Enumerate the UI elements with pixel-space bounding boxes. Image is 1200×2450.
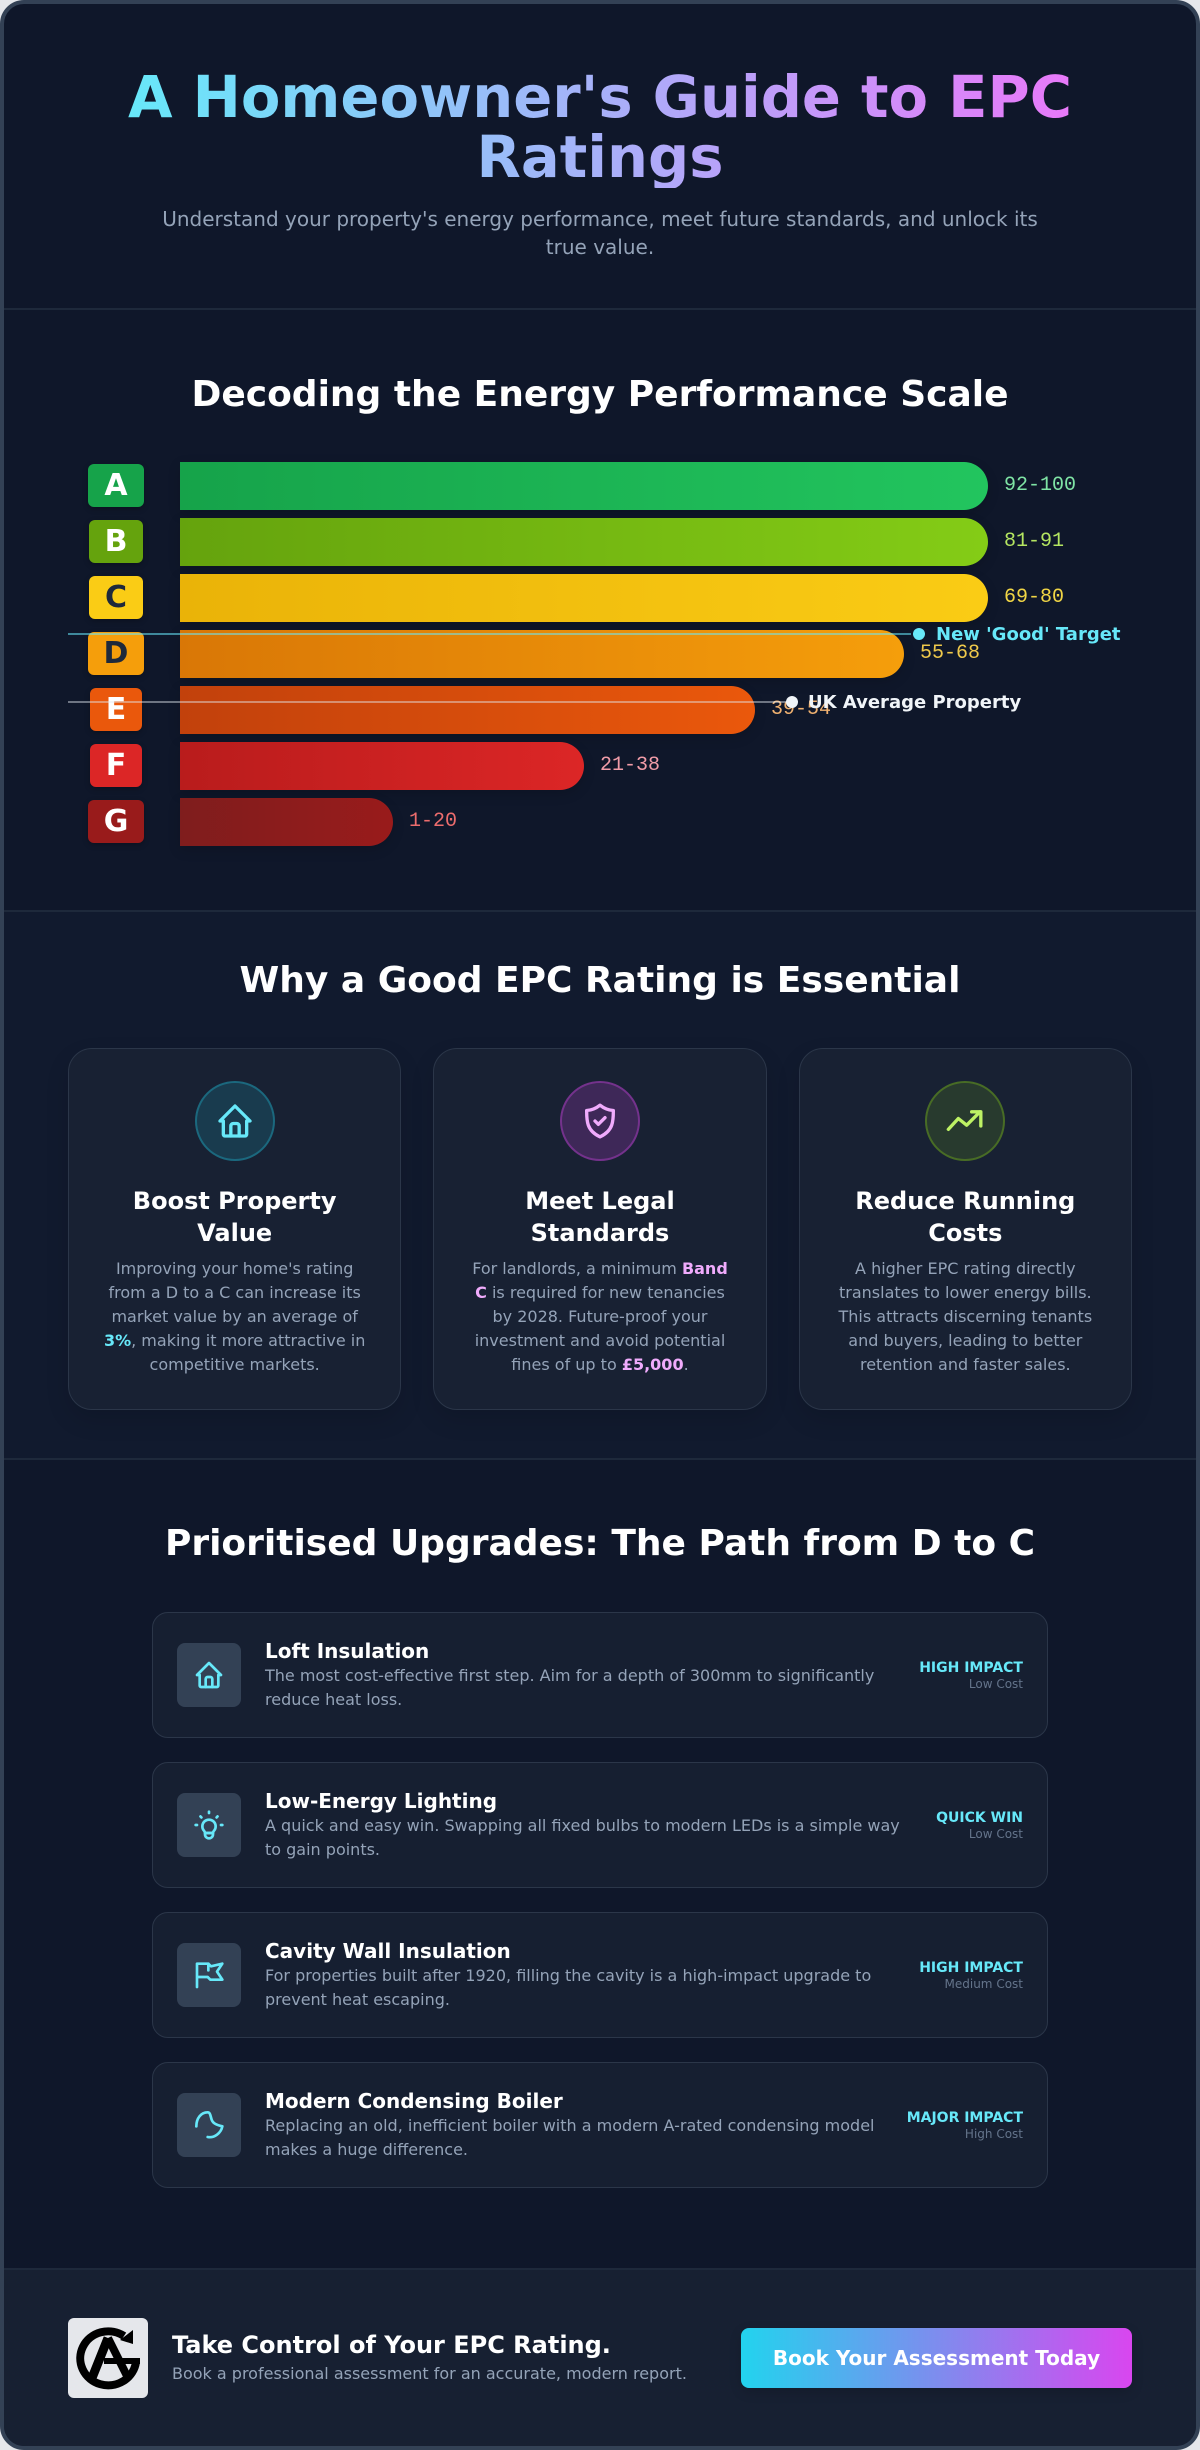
card text: A higher EPC rating directly translates to lower energy bills. This attracts discerning tenants and buyers, leading to better retention and faster sales.	[838, 1259, 1092, 1374]
impact tag: Medium Cost	[945, 1977, 1023, 1991]
marker: new good target: New 'Good' Target	[936, 624, 1121, 645]
upgrade: lighting	[152, 1762, 1048, 1888]
subtitle: Understand your property's energy performance, meet future standards, and unlock its true value.	[162, 207, 1038, 259]
title	[128, 64, 1072, 191]
heading: upgrades: Prioritised Upgrades: The Path from D to C	[165, 1523, 1035, 1564]
title: Ratings	[476, 124, 724, 191]
impact tag	[919, 1960, 1023, 1991]
impact tag: MAJOR IMPACT	[907, 2110, 1023, 2126]
rating G: G	[104, 804, 128, 839]
impact tag	[936, 1810, 1023, 1841]
card text: Improving your home's rating from a D to a C can increase its market value by an average of 3%, making it more attractive in competitive markets.	[104, 1259, 365, 1374]
button	[741, 2328, 1132, 2388]
rating A: A	[104, 468, 128, 503]
logo	[68, 2318, 148, 2398]
card: running costs	[799, 1048, 1132, 1410]
rating E	[90, 686, 831, 734]
upgrade text: A quick and easy win. Swapping all fixed bulbs to modern LEDs is a simple way to gain points.	[265, 1816, 900, 1859]
upgrade text: For properties built after 1920, filling the cavity is a high-impact upgrade to prevent heat escaping.	[265, 1966, 871, 2009]
card title: Boost Property Value	[133, 1187, 337, 1247]
rating E: 39-54	[771, 698, 831, 721]
impact tag	[907, 2110, 1023, 2141]
impact tag: HIGH IMPACT	[919, 1660, 1023, 1676]
impact tag: High Cost	[965, 2127, 1023, 2141]
rating G: 1-20	[409, 810, 457, 833]
marker: new good target	[68, 624, 1121, 645]
rating F: F	[106, 748, 126, 783]
footer text: Book a professional assessment for an accurate, modern report.	[172, 2364, 687, 2383]
rating B: 81-91	[1004, 530, 1064, 553]
rating D: D	[104, 636, 128, 671]
upgrade title: Cavity Wall Insulation	[265, 1939, 511, 1963]
title: A Homeowner's Guide to EPC	[128, 64, 1072, 131]
icon: house	[195, 1081, 275, 1161]
upgrade text: Replacing an old, inefficient boiler with a modern A-rated condensing model makes a huge difference.	[265, 2116, 874, 2159]
impact tag: HIGH IMPACT	[919, 1960, 1023, 1976]
rating A	[88, 462, 1076, 510]
rating C: 69-80	[1004, 586, 1064, 609]
card: legal standards	[433, 1048, 767, 1410]
card text: For landlords, a minimum Band C is required for new tenancies by 2028. Future-proof your investment and avoid potential fines of up to £5,000.	[472, 1259, 728, 1374]
footer title: Take Control of Your EPC Rating.	[172, 2331, 611, 2359]
upgrade title: Modern Condensing Boiler	[265, 2089, 563, 2113]
upgrade: boiler	[152, 2062, 1048, 2188]
rating C: C	[105, 580, 127, 615]
panel: header	[4, 4, 1196, 310]
button: Book Your Assessment Today	[773, 2346, 1100, 2370]
icon: flag	[177, 1943, 241, 2007]
marker: UK average	[68, 692, 1021, 713]
impact tag: Low Cost	[969, 1677, 1023, 1691]
rating D: 55-68	[920, 642, 980, 665]
rating G	[88, 798, 457, 846]
rating D	[88, 630, 980, 678]
icon: house	[177, 1643, 241, 1707]
rating F: 21-38	[600, 754, 660, 777]
heading: why: Why a Good EPC Rating is Essential	[240, 960, 960, 1001]
upgrade: loft insulation	[152, 1612, 1048, 1738]
card: property value	[68, 1048, 401, 1410]
heading: scale: Decoding the Energy Performance Scale	[191, 374, 1009, 415]
rating C	[89, 574, 1064, 622]
rating B: B	[105, 524, 127, 559]
marker: UK average: UK Average Property	[808, 692, 1021, 713]
impact tag: Low Cost	[969, 1827, 1023, 1841]
panel: footer	[4, 2268, 1196, 2446]
upgrade title: Low-Energy Lighting	[265, 1789, 497, 1813]
card title: Reduce Running Costs	[855, 1187, 1075, 1247]
impact tag	[919, 1660, 1023, 1691]
upgrade title: Loft Insulation	[265, 1639, 429, 1663]
rating B	[89, 518, 1064, 566]
panel: EPC rating scale	[68, 462, 1121, 846]
rating F	[90, 742, 660, 790]
icon: flame curve	[177, 2093, 241, 2157]
panel: why it matters background	[4, 910, 1196, 1460]
icon: trend up	[925, 1081, 1005, 1161]
icon: light bulb	[177, 1793, 241, 1857]
impact tag: QUICK WIN	[936, 1810, 1023, 1826]
rating A: 92-100	[1004, 474, 1076, 497]
card title: Meet Legal Standards	[525, 1187, 675, 1247]
upgrade text: The most cost-effective first step. Aim for a depth of 300mm to significantly reduce heat loss.	[265, 1666, 874, 1709]
icon: shield	[560, 1081, 640, 1161]
rating E: E	[106, 692, 126, 727]
upgrade: cavity wall	[152, 1912, 1048, 2038]
